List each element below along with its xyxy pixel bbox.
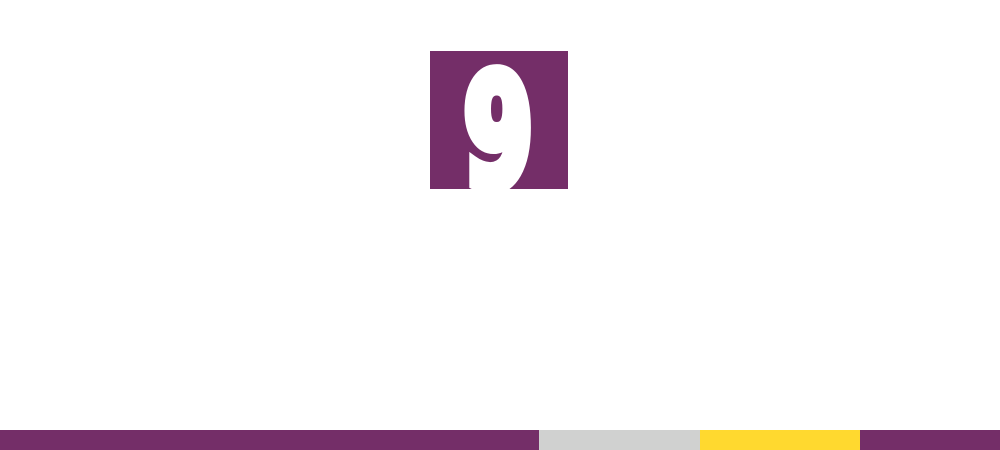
number badge: 9	[430, 51, 568, 189]
footer colour bar	[0, 430, 1000, 450]
number badge: 9: 9	[464, 42, 533, 222]
